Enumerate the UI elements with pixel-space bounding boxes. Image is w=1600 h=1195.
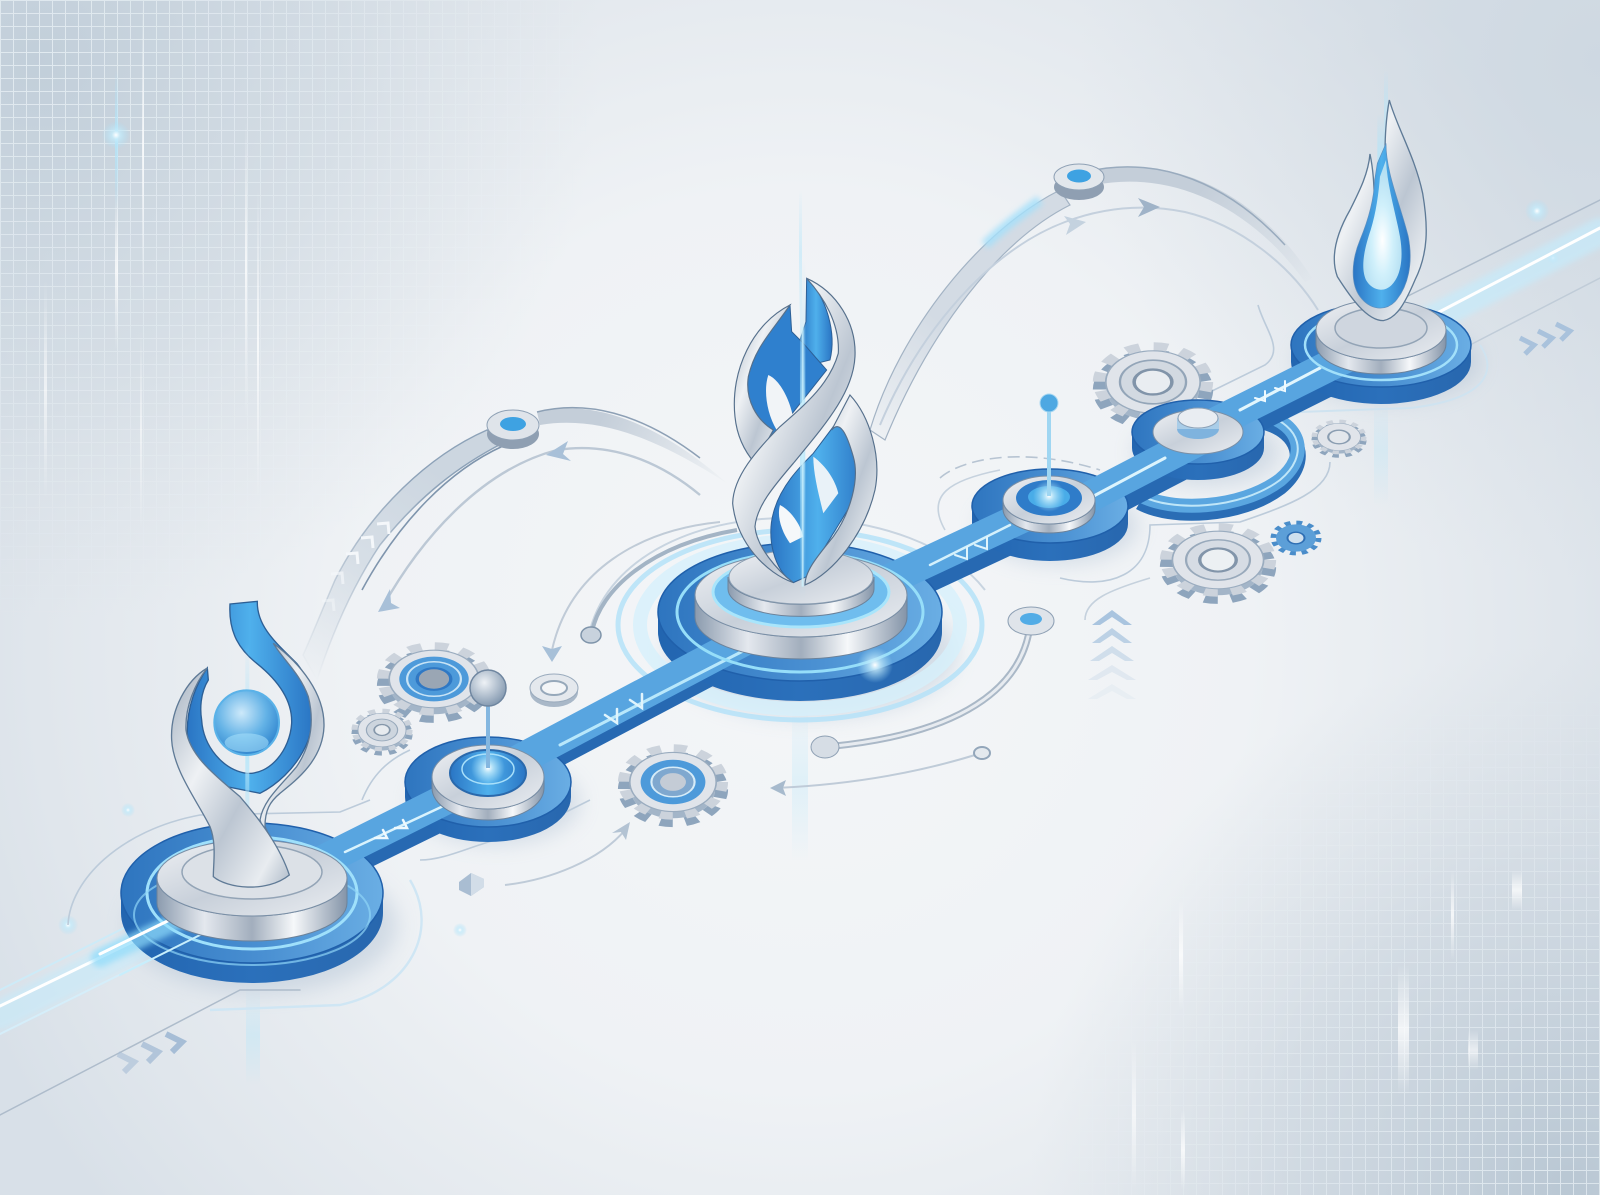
connector pill	[487, 410, 539, 449]
blue strands	[800, 278, 832, 363]
rear silver strand	[805, 395, 877, 585]
icon: diamond token	[459, 873, 484, 896]
platform six details	[1305, 300, 1457, 380]
blue teardrop	[1353, 143, 1410, 308]
half ring track under node five	[1140, 415, 1298, 513]
platform four details	[1003, 394, 1095, 533]
gear: small blue	[1274, 523, 1318, 553]
silver disc top	[157, 840, 347, 916]
platform five details	[1153, 408, 1243, 454]
probe stem and ball	[486, 700, 490, 768]
left silver rim	[734, 305, 790, 463]
gear: upper right	[1100, 347, 1206, 425]
decorative grid: top left	[0, 0, 376, 408]
return arrow with dot	[770, 747, 990, 796]
platform two details	[432, 670, 544, 820]
gear: upper left blue	[384, 647, 484, 719]
beam glow across base	[100, 910, 200, 975]
platform three	[658, 543, 942, 701]
chevrons: lower left	[118, 1034, 182, 1072]
circuit guide lines	[68, 305, 1487, 1010]
platform one	[121, 823, 383, 983]
curved link with end caps	[811, 607, 1054, 758]
platform two	[405, 737, 571, 842]
outer silver body	[1334, 100, 1426, 321]
light beam: upper right exit	[1400, 200, 1600, 345]
chevrons on arc	[322, 523, 389, 611]
sculpture two: twisted helix	[733, 260, 877, 600]
front silver band	[733, 278, 855, 583]
connector pill	[1054, 164, 1104, 200]
core beam	[800, 260, 805, 600]
platform one details	[100, 837, 370, 975]
sculpture one: open flame with orb	[172, 601, 324, 887]
soft shadows beneath platforms	[127, 322, 1480, 993]
platform three details	[677, 550, 923, 683]
arrow: curve beside lower nodes	[505, 822, 630, 885]
glow rings around central platform	[590, 518, 985, 720]
gear: lower right	[1167, 528, 1269, 600]
gear: lower center	[624, 749, 722, 823]
probe stem and ball	[1047, 412, 1051, 496]
gear: small left	[355, 711, 409, 753]
right silver rim	[260, 643, 324, 880]
curved arrow with end node near center	[542, 522, 737, 662]
small ring token	[530, 674, 578, 707]
glass orb	[214, 690, 279, 755]
button	[1177, 408, 1219, 439]
arc connector: upper right	[870, 164, 1312, 440]
arrow: upper right forward path	[880, 198, 1318, 425]
decorative grid: bottom right	[1244, 847, 1600, 1195]
track sides	[252, 354, 1381, 908]
gear: small right	[1315, 422, 1363, 456]
platform five	[1132, 400, 1264, 480]
platform four	[972, 469, 1128, 561]
chevrons: upper right	[1520, 324, 1570, 354]
arrow: left return path	[378, 441, 700, 612]
openings	[766, 375, 793, 430]
arc connector: left return	[303, 408, 728, 680]
left silver swoosh	[172, 668, 289, 887]
chevrons: pointing up	[1088, 610, 1136, 699]
platform six	[1291, 303, 1471, 404]
light beam: lower left entry	[0, 890, 300, 1115]
base top	[121, 823, 383, 963]
inner light	[1363, 160, 1402, 290]
sculpture three: teardrop flame	[1334, 100, 1426, 321]
track top surfaces	[300, 340, 1381, 872]
track light lines and arrows	[345, 368, 1320, 852]
